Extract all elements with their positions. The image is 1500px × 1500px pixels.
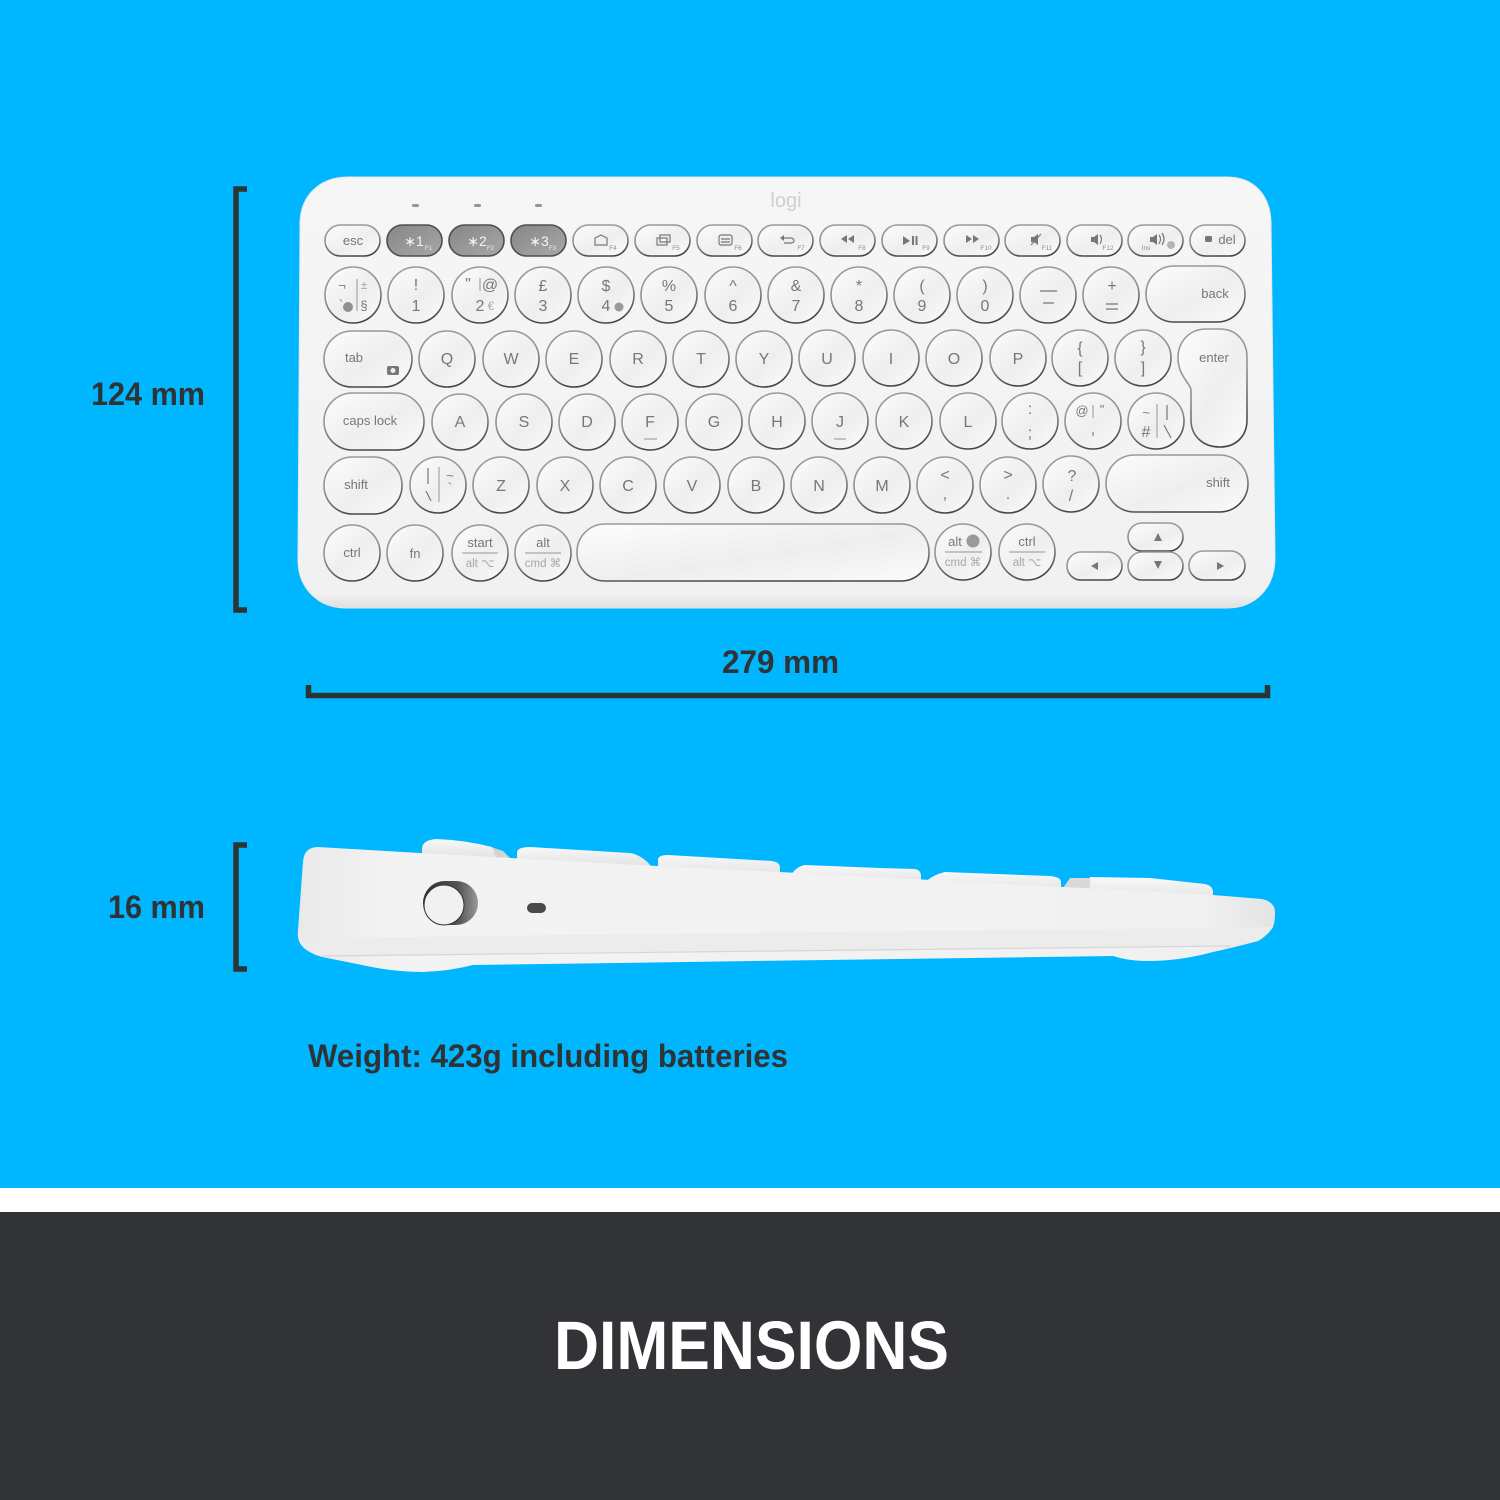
key: windows [635, 225, 690, 256]
key: V [664, 457, 720, 513]
key: left bracket [1052, 330, 1108, 386]
key: 2: @ [482, 277, 498, 294]
key: Z [473, 457, 529, 513]
key: comma: < [940, 467, 950, 484]
key: alt: cmd ⌘ [525, 557, 561, 570]
logi logo: logi [770, 190, 802, 212]
key: S: S [519, 414, 529, 431]
keyboard side view [298, 839, 1275, 972]
key: mute [1005, 225, 1060, 256]
width label: 279 mm [722, 644, 839, 680]
key: X [537, 457, 593, 513]
key: 2: 2 [476, 298, 485, 315]
key: 7: & [791, 278, 802, 295]
key: right shift [1106, 455, 1248, 512]
key: bluetooth 3 [511, 225, 566, 256]
key: 3: £ [539, 278, 548, 295]
key: left shift: shift [344, 477, 368, 492]
key: R [610, 331, 666, 387]
key: 6 [705, 267, 761, 323]
key: semicolon: : [1028, 401, 1032, 418]
key: menu [697, 225, 752, 256]
key: H [749, 393, 805, 449]
key: 5 [641, 267, 697, 323]
key: bluetooth 1: F1 [425, 246, 433, 252]
key: alt gr [935, 524, 991, 580]
key: alt gr: alt [948, 534, 962, 549]
key: apostrophe: @ [1075, 403, 1089, 418]
key: 2: € [488, 301, 495, 313]
key: W [483, 331, 539, 387]
key: backslash: ` [448, 480, 452, 495]
key: P [990, 330, 1046, 386]
key: E: E [569, 351, 579, 368]
dark footer panel [0, 1212, 1500, 1500]
width dimension bracket [308, 685, 1268, 696]
key: P: P [1013, 351, 1023, 368]
key: 9 [894, 267, 950, 323]
key: C: C [622, 478, 634, 495]
key: play pause [882, 225, 937, 256]
key: 0 [957, 267, 1013, 323]
key: back [758, 225, 813, 256]
key: del: del [1218, 232, 1236, 247]
key: apostrophe: " [1100, 402, 1105, 417]
key: period: . [1006, 486, 1010, 503]
key: start: alt ⌥ [466, 558, 494, 570]
key: tab [324, 331, 412, 387]
key: 5: % [662, 278, 676, 295]
key: S [496, 394, 552, 450]
key: volume down [1067, 225, 1122, 256]
key: bluetooth 2 [449, 225, 504, 256]
key: hash [1128, 393, 1184, 449]
key: 8: 8 [855, 298, 864, 315]
key: F: F [645, 414, 655, 431]
key: X: X [560, 478, 571, 495]
key: Q: Q [441, 351, 453, 368]
key: M [854, 457, 910, 513]
key: semicolon: ; [1028, 425, 1032, 442]
power switch [423, 881, 478, 925]
key: 9: 9 [918, 298, 927, 315]
arrow key: right [1189, 551, 1245, 580]
number row [325, 266, 1245, 323]
key: 9: ( [919, 278, 925, 295]
key: comma: , [943, 486, 947, 503]
key: J: J [836, 414, 844, 431]
blue background panel [0, 0, 1500, 1188]
key: 0: ) [982, 278, 988, 295]
key: ctrl: ctrl [343, 545, 361, 560]
key: 6: ^ [729, 278, 737, 295]
key: right ctrl: ctrl [1018, 534, 1036, 549]
key: forward [944, 225, 999, 256]
key: caps lock [324, 393, 424, 450]
key: 8: * [856, 278, 862, 295]
key: enter: enter [1199, 350, 1229, 365]
key: Y: Y [759, 351, 770, 368]
key: D: D [581, 414, 593, 431]
key: 7: 7 [792, 298, 801, 315]
weight note: Weight: 423g including batteries [308, 1038, 788, 1074]
key: F [622, 394, 678, 450]
key: G [686, 394, 742, 450]
key: W: W [503, 351, 519, 368]
key: backslash [410, 457, 466, 513]
key: section: ` [339, 297, 343, 312]
key: 3: 3 [539, 298, 548, 315]
key: del [1190, 225, 1245, 256]
key: Q [419, 331, 475, 387]
white separator band [0, 1188, 1500, 1212]
key: home: F4 [609, 245, 617, 252]
key: 4: $ [602, 278, 611, 295]
key: rewind: F8 [858, 245, 866, 252]
key: rewind [820, 225, 875, 256]
key: section: ± [361, 280, 367, 292]
key: esc: esc [343, 233, 364, 248]
key: right bracket: } [1140, 339, 1146, 356]
key: 6: 6 [729, 298, 738, 315]
key: apostrophe: , [1091, 421, 1095, 438]
key: section: ¬ [338, 278, 346, 293]
key: minus [1020, 267, 1076, 323]
key: E [546, 331, 602, 387]
key: volume up: Ins [1142, 245, 1151, 252]
key: N: N [813, 478, 825, 495]
connect light [527, 903, 546, 913]
key: fn: fn [410, 546, 420, 561]
key: plus [1083, 267, 1139, 323]
keyboard top view [298, 177, 1275, 608]
key: section [325, 267, 381, 323]
key: Z: Z [496, 478, 506, 495]
key: period [980, 457, 1036, 513]
key: 7 [768, 267, 824, 323]
key: tab: tab [345, 350, 363, 365]
key: 2: " [465, 276, 471, 293]
side keycaps [422, 839, 1213, 900]
key: space bar [577, 524, 929, 581]
lower seam line [322, 946, 1230, 956]
key: enter [1178, 329, 1247, 447]
key: D [559, 394, 615, 450]
key: L [940, 393, 996, 449]
key: forward: F10 [980, 245, 992, 252]
arrow key: up [1128, 523, 1183, 551]
key: caps lock: caps lock [343, 413, 398, 428]
key: left shift [324, 457, 402, 514]
bottom row [324, 523, 1245, 581]
key: K [876, 393, 932, 449]
ZXCV row [324, 455, 1248, 514]
key: T: T [696, 351, 706, 368]
key: 2 [452, 267, 508, 323]
key: 4 [578, 267, 634, 323]
key: esc [325, 225, 380, 256]
key: hash: # [1142, 424, 1151, 441]
key: O: O [948, 351, 960, 368]
key: left bracket: { [1077, 340, 1083, 357]
key: volume up [1128, 225, 1183, 256]
key: G: G [708, 414, 720, 431]
key: 1: ! [414, 277, 418, 294]
key: K: K [899, 414, 910, 431]
arrow key: left [1067, 552, 1122, 580]
key: U [799, 330, 855, 386]
side body seam [299, 927, 1273, 956]
key: N [791, 457, 847, 513]
key: 3 [515, 267, 571, 323]
key: slash: / [1069, 488, 1074, 505]
function key row [325, 225, 1245, 256]
key: volume down: F12 [1102, 245, 1114, 252]
key: back: back [1201, 286, 1229, 301]
key: play pause: F9 [922, 245, 930, 252]
height label: 124 mm [91, 376, 205, 412]
key: alt gr: cmd ⌘ [945, 556, 981, 569]
key: back: F7 [797, 245, 805, 252]
key: H: H [771, 414, 783, 431]
key: hash: ~ [1142, 405, 1150, 420]
key: fn [387, 525, 443, 581]
key: alt: alt [536, 535, 550, 550]
key: apostrophe [1065, 393, 1121, 449]
key: A: A [455, 414, 466, 431]
key: R: R [632, 351, 644, 368]
footer title: DIMENSIONS [554, 1307, 949, 1384]
key: section: § [360, 298, 368, 313]
key: V: V [687, 478, 698, 495]
side body [298, 847, 1275, 972]
key: slash: ? [1068, 468, 1077, 485]
key: 1: 1 [412, 298, 421, 315]
key: bluetooth 3: F3 [549, 246, 557, 252]
key: O [926, 330, 982, 386]
key: start: start [467, 535, 493, 550]
key: right bracket [1115, 330, 1171, 386]
key: J [812, 393, 868, 449]
height bracket: side view [236, 845, 247, 969]
key: bluetooth 2: ∗2 [467, 233, 487, 249]
height dimension bracket [236, 189, 247, 610]
key: mute: F11 [1042, 245, 1053, 252]
key: U: U [821, 351, 833, 368]
key: bluetooth 1 [387, 225, 442, 256]
key: bluetooth 3: ∗3 [529, 233, 549, 249]
key: Y [736, 331, 792, 387]
key: 4: 4 [602, 298, 611, 315]
key: left bracket: [ [1078, 360, 1083, 377]
key: right bracket: ] [1141, 360, 1145, 377]
ASDF row [324, 393, 1184, 450]
key: B: B [751, 478, 761, 495]
key: back [1146, 266, 1245, 322]
thickness label: 16 mm [108, 889, 205, 925]
key: B [728, 457, 784, 513]
key: alt [515, 525, 571, 581]
keyboard body [298, 177, 1275, 608]
key: 1 [388, 267, 444, 323]
key: L: L [964, 414, 973, 431]
key: plus: + [1107, 278, 1117, 295]
key: 5: 5 [665, 298, 674, 315]
QWERTY row [324, 329, 1247, 447]
key: right ctrl [999, 524, 1055, 580]
key: right ctrl: alt ⌥ [1013, 557, 1041, 569]
key: start [452, 525, 508, 581]
key: ctrl [324, 525, 380, 581]
key: period: > [1003, 467, 1013, 484]
key: M: M [875, 478, 889, 495]
key: C [600, 457, 656, 513]
key: slash [1043, 456, 1099, 512]
key: I: I [889, 351, 893, 368]
key: right shift: shift [1206, 475, 1230, 490]
key: backslash: ~ [446, 468, 454, 483]
key: home [573, 225, 628, 256]
key: bluetooth 1: ∗1 [404, 233, 424, 249]
key: menu: F6 [734, 245, 742, 252]
key: bluetooth 2: F2 [487, 246, 495, 252]
key: I [863, 330, 919, 386]
key: A [432, 394, 488, 450]
arrow key: down [1128, 552, 1183, 580]
key: comma [917, 457, 973, 513]
key: T [673, 331, 729, 387]
key: semicolon [1002, 393, 1058, 449]
key: 8 [831, 267, 887, 323]
key: 0: 0 [981, 298, 990, 315]
status lights [412, 204, 542, 207]
key: windows: F5 [672, 245, 680, 252]
